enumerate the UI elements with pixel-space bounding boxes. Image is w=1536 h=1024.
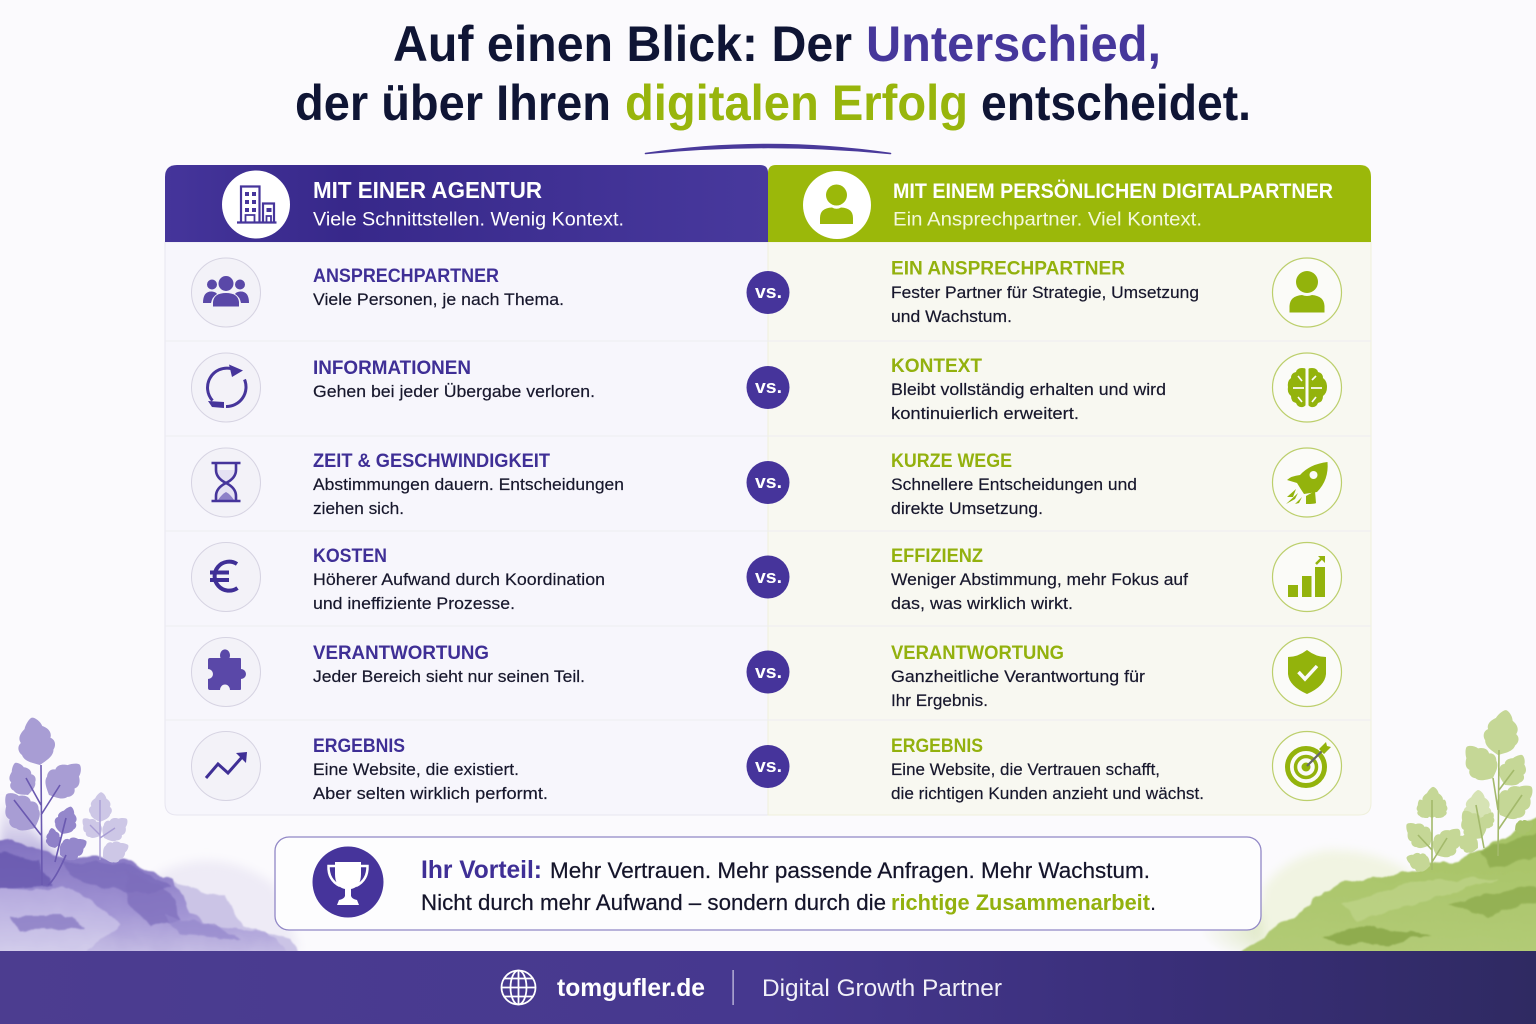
icon: brain: [1272, 353, 1342, 422]
row 1 left: Ansprechpartner: Viele Personen, je nach Thema.: [313, 290, 564, 309]
callout text: [421, 856, 1156, 915]
row 6 right: Ergebnis: die richtigen Kunden anzieht und wächst.: [891, 784, 1204, 803]
tagline: Digital Growth Partner: [762, 975, 1002, 1002]
row 4 left: Kosten: Höherer Aufwand durch Koordination: [313, 570, 605, 589]
icon: hourglass: [192, 448, 260, 517]
vs badge 3: vs.: [755, 472, 782, 492]
illustration: purple hill with plants: [0, 715, 310, 975]
row 1 left: Ansprechpartner: ANSPRECHPARTNER: [313, 265, 499, 287]
icon: circular arrows: [192, 353, 260, 422]
row 2 right: Kontext: [891, 353, 1342, 423]
row 3 right: Kurze Wege: direkte Umsetzung.: [891, 499, 1043, 518]
header text: [893, 178, 1333, 230]
header: personal partner: [768, 165, 1371, 242]
row 1 right: Ein Ansprechpartner: und Wachstum.: [891, 307, 1012, 326]
vs badge 4: vs.: [755, 567, 782, 587]
icon: puzzle piece: [192, 638, 260, 706]
row 6 left: Ergebnis: [192, 732, 548, 803]
row 4 right: Effizienz: [891, 542, 1342, 613]
header text: Ein Ansprechpartner. Viel Kontext.: [893, 208, 1202, 230]
row 1 right: Ein Ansprechpartner: Fester Partner für Strategie, Umsetzung: [891, 283, 1199, 302]
row 2 right: Kontext: Bleibt vollständig erhalten und wird: [891, 380, 1166, 399]
panel: left column background: [165, 242, 768, 815]
icon: shield with check: [1272, 638, 1342, 706]
icon: person: [803, 171, 871, 239]
row 2 left: Informationen: [192, 353, 595, 422]
row 3 left: Zeit und Geschwindigkeit: ziehen sich.: [313, 499, 404, 518]
icon: target with arrow: [1272, 732, 1342, 800]
website: tomgufler.de: [557, 974, 705, 1002]
row 5 right: Verantwortung: Ihr Ergebnis.: [891, 691, 988, 710]
vs badge 3: [746, 461, 790, 504]
vs badge 6: vs.: [755, 756, 782, 776]
callout text: Mehr Vertrauen. Mehr passende Anfragen. Mehr Wachstum.: [550, 858, 1150, 883]
row 5 right: Verantwortung: Ganzheitliche Verantwortung für: [891, 667, 1145, 686]
row 3 left: Zeit und Geschwindigkeit: Abstimmungen dauern. Entscheidungen: [313, 475, 624, 494]
icon: trophy: [312, 846, 384, 918]
row 2 right: Kontext: KONTEXT: [891, 355, 982, 377]
row 5 right: Verantwortung: [891, 638, 1342, 710]
row 3 right: Kurze Wege: Schnellere Entscheidungen und: [891, 475, 1137, 494]
vs badge 1: [746, 271, 790, 314]
row 5 right: Verantwortung: VERANTWORTUNG: [891, 642, 1064, 664]
callout text: richtige Zusammenarbeit: [891, 890, 1151, 915]
row 4 right: Effizienz: das, was wirklich wirkt.: [891, 594, 1073, 613]
icon: rising bars: [1272, 542, 1342, 612]
row 6 right: Ergebnis: [891, 732, 1342, 803]
row 3 right: Kurze Wege: KURZE WEGE: [891, 450, 1012, 472]
vs badge 5: [746, 650, 790, 694]
title underline swoosh: [646, 144, 890, 154]
row 6 left: Ergebnis: Eine Website, die existiert.: [313, 760, 519, 779]
illustration: green hill with plants: [1200, 707, 1536, 975]
callout text: .: [1150, 890, 1156, 915]
vs badge 4: [746, 556, 790, 598]
icon: group of people: [192, 258, 260, 327]
row 4 right: Effizienz: Weniger Abstimmung, mehr Fokus auf: [891, 570, 1188, 589]
icon: trend arrow: [192, 732, 260, 800]
header text: Viele Schnittstellen. Wenig Kontext.: [313, 208, 624, 230]
vs badge 1: vs.: [755, 282, 782, 302]
vs badge 2: vs.: [755, 377, 782, 397]
row 5 left: Verantwortung: Jeder Bereich sieht nur seinen Teil.: [313, 667, 585, 686]
row 6 left: Ergebnis: ERGEBNIS: [313, 735, 405, 757]
icon: globe: [502, 970, 536, 1004]
row 3 right: Kurze Wege: [891, 448, 1342, 518]
vs badge 2: [746, 366, 790, 409]
header text: MIT EINEM PERSÖNLICHEN DIGITALPARTNER: [893, 178, 1333, 203]
panel: right column background: [768, 242, 1371, 815]
title: der über Ihren: [295, 75, 611, 131]
callout: your advantage: [275, 837, 1261, 930]
vs badge 5: vs.: [755, 662, 782, 682]
icon: rocket: [1272, 448, 1342, 517]
row 4 right: Effizienz: EFFIZIENZ: [891, 545, 983, 567]
row 1 left: Ansprechpartner: [192, 258, 564, 327]
vs badge 6: [746, 745, 790, 788]
icon: euro: [192, 542, 260, 612]
header: agency: [165, 165, 768, 242]
row 2 left: Informationen: Gehen bei jeder Übergabe verloren.: [313, 382, 595, 401]
footer bar: [0, 951, 1536, 1024]
header text: [313, 177, 624, 230]
title: Auf einen Blick: Der: [393, 16, 852, 72]
row 3 left: Zeit und Geschwindigkeit: ZEIT & GESCHWINDIGKEIT: [313, 450, 550, 472]
row 2 left: Informationen: INFORMATIONEN: [313, 357, 471, 379]
icon: office building: [222, 170, 290, 238]
row 5 left: Verantwortung: [192, 638, 585, 706]
row 5 left: Verantwortung: VERANTWORTUNG: [313, 642, 489, 664]
row 3 left: Zeit und Geschwindigkeit: [192, 448, 624, 518]
row 2 right: Kontext: kontinuierlich erweitert.: [891, 404, 1079, 423]
callout text: Ihr Vorteil:: [421, 856, 542, 884]
row 1 right: Ein Ansprechpartner: [891, 258, 1342, 327]
callout text: Nicht durch mehr Aufwand – sondern durch die: [421, 890, 886, 915]
row 6 right: Ergebnis: Eine Website, die Vertrauen schafft,: [891, 760, 1160, 779]
icon: person: [1272, 258, 1342, 327]
title: Unterschied,: [866, 16, 1161, 72]
title: entscheidet.: [981, 75, 1251, 131]
row 1 right: Ein Ansprechpartner: EIN ANSPRECHPARTNER: [891, 258, 1125, 280]
row 6 right: Ergebnis: ERGEBNIS: [891, 735, 983, 757]
row 4 left: Kosten: KOSTEN: [313, 545, 387, 567]
row 4 left: Kosten: [192, 542, 605, 613]
title: digitalen Erfolg: [625, 75, 968, 131]
header text: MIT EINER AGENTUR: [313, 177, 542, 203]
title: [295, 16, 1251, 131]
row 6 left: Ergebnis: Aber selten wirklich performt.: [313, 784, 548, 803]
row 4 left: Kosten: und ineffiziente Prozesse.: [313, 594, 515, 613]
